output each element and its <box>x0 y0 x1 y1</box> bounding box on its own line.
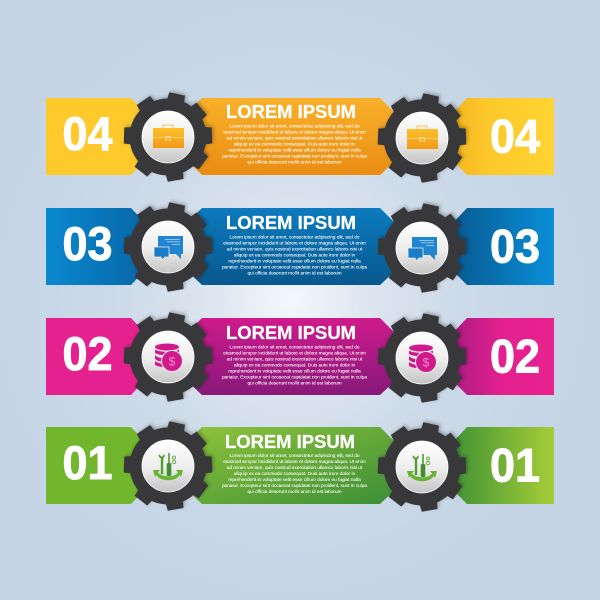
body text 04: Lorem ipsum dolor sit amet, consectetur adipiscing elit, sed do <box>230 124 360 128</box>
row 03: blue banner <box>46 202 554 293</box>
body text 01: reprehenderit in voluptate velit esse cillum dolore eu fugiat nulla <box>228 477 361 482</box>
body text 02 <box>222 344 367 386</box>
body text 03: aliquip ex ea commodo consequat. Duis aute irure dolor in <box>234 252 356 258</box>
right number 04: 04 <box>490 110 540 162</box>
row 04: yellow banner <box>46 92 554 183</box>
left gear with tools <box>124 421 212 511</box>
body text 02: reprehenderit in voluptate velit esse cillum dolore eu fugiat nulla <box>228 368 361 374</box>
body text 01: eiusmod tempor incididunt ut labore et dolore magna aliqua. Ut enim <box>223 459 366 464</box>
right gear with tools <box>378 422 466 512</box>
body text 03: eiusmod tempor incididunt ut labore et dolore magna aliqua. Ut enim <box>223 240 366 246</box>
body text 03: qui officia deserunt mollit anim id est laborum <box>247 270 342 276</box>
center panel 02 <box>186 318 396 395</box>
body text 01 <box>222 453 367 494</box>
body text 04: aliquip ex ea commodo consequat. Duis aute irure dolor in <box>234 142 356 146</box>
right number 03: 03 <box>490 220 540 272</box>
center panel 03 <box>186 208 396 285</box>
right tab 03 <box>450 208 554 285</box>
right gear with briefcase <box>378 93 466 183</box>
right gear with chat bubbles <box>378 203 466 293</box>
body text 01: ad minim veniam, quis nostrud exercitation ullamco laboris nisi ut <box>227 465 363 470</box>
title 04: LOREM IPSUM <box>226 101 356 122</box>
body text 02: eiusmod tempor incididunt ut labore et dolore magna aliqua. Ut enim <box>223 350 366 356</box>
left tab 01 <box>46 427 150 504</box>
body text 03: Lorem ipsum dolor sit amet, consectetur adipiscing elit, sed do <box>230 234 360 240</box>
left tab 04 <box>46 98 150 175</box>
body text 04: ad minim veniam, quis nostrud exercitation ullamco laboris nisi ut <box>227 136 363 140</box>
body text 04 <box>222 124 367 164</box>
body text 04: eiusmod tempor incididunt ut labore et dolore magna aliqua. Ut enim <box>223 130 366 134</box>
left number 03: 03 <box>62 217 112 270</box>
right tab 04 <box>450 98 554 175</box>
body text 01: aliquip ex ea commodo consequat. Duis aute irure dolor in <box>234 471 356 476</box>
right number 02: 02 <box>490 330 540 382</box>
title 01: LOREM IPSUM <box>225 431 355 452</box>
body text 03: ad minim veniam, quis nostrud exercitation ullamco laboris nisi ut <box>227 246 363 252</box>
title 02: LOREM IPSUM <box>226 322 356 343</box>
body text 04: reprehenderit in voluptate velit esse cillum dolore eu fugiat nulla <box>228 148 361 152</box>
left gear with coins <box>124 312 212 402</box>
body text 02: pariatur. Excepteur sint occaecat cupidatat non proident, sunt in culpa <box>222 374 367 380</box>
body text 04: qui officia deserunt mollit anim id est laborum <box>247 160 342 164</box>
left tab 02 <box>46 318 150 395</box>
center panel 04 <box>186 98 396 175</box>
body text 02: aliquip ex ea commodo consequat. Duis aute irure dolor in <box>234 362 356 368</box>
body text 01: pariatur. Excepteur sint occaecat cupidatat non proident, sunt in culpa <box>222 483 367 488</box>
row 01: green banner <box>46 421 554 512</box>
right tab 01 <box>450 427 554 504</box>
body text 04: pariatur. Excepteur sint occaecat cupidatat non proident, sunt in culpa <box>222 154 367 158</box>
body text 03: reprehenderit in voluptate velit esse cillum dolore eu fugiat nulla <box>228 258 361 264</box>
body text 01: qui officia deserunt mollit anim id est laborum <box>247 489 342 494</box>
body text 03: pariatur. Excepteur sint occaecat cupidatat non proident, sunt in culpa <box>222 264 367 270</box>
center panel 01 <box>186 427 396 504</box>
body text 03 <box>222 234 367 276</box>
body text 02: Lorem ipsum dolor sit amet, consectetur adipiscing elit, sed do <box>230 344 360 350</box>
left gear with chat bubbles <box>124 202 212 292</box>
left number 02: 02 <box>62 327 112 380</box>
left gear with briefcase <box>124 92 212 182</box>
row 02: magenta banner <box>46 312 554 403</box>
body text 01: Lorem ipsum dolor sit amet, consectetur adipiscing elit, sed do <box>230 453 360 458</box>
left number 04: 04 <box>62 107 112 160</box>
left tab 03 <box>46 208 150 285</box>
right number 01: 01 <box>490 438 540 492</box>
left number 01: 01 <box>62 436 112 489</box>
title 03: LOREM IPSUM <box>226 212 356 233</box>
body text 02: ad minim veniam, quis nostrud exercitation ullamco laboris nisi ut <box>227 356 363 362</box>
body text 02: qui officia deserunt mollit anim id est laborum <box>247 380 342 386</box>
right gear with coins <box>378 313 466 403</box>
right tab 02 <box>450 318 554 395</box>
